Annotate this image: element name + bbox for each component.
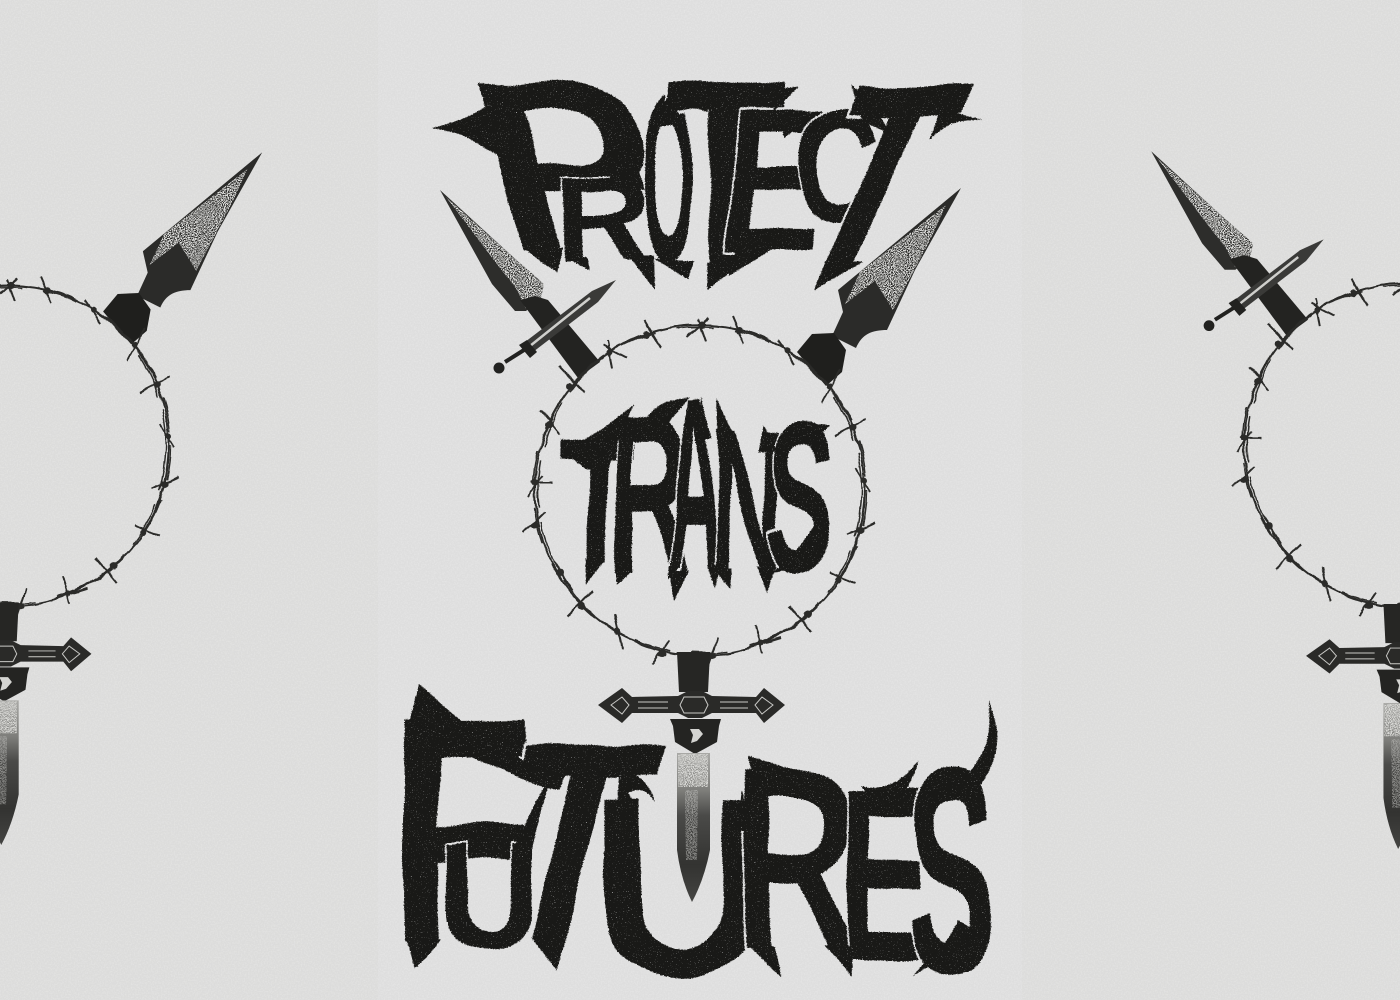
letter U: U: [439, 808, 540, 984]
letter F: F: [388, 650, 535, 1000]
lettering: PROTECT: [431, 25, 1003, 321]
letter S: S: [767, 377, 835, 619]
dagger handle: [677, 652, 710, 692]
letter T: T: [753, 31, 1003, 321]
lettering: TRANS: [560, 348, 835, 619]
letter C: C: [795, 76, 879, 255]
dagger blade: [677, 753, 710, 902]
emblem: barbed wire ring, spears, dagger: [440, 188, 961, 902]
panel: centre poster: [378, 0, 1022, 1000]
barbed wire ring: [524, 316, 874, 668]
letter R: R: [555, 152, 649, 288]
dagger cross guard: [598, 688, 785, 723]
lettering: FUTURES: [388, 650, 996, 1000]
letter O: O: [640, 44, 698, 314]
letter E: E: [713, 66, 835, 293]
spikes on PROTECT: [431, 83, 984, 291]
panel: right poster crop, repeat of emblem: [1151, 149, 1400, 849]
letter A: A: [667, 348, 722, 616]
spikes on FUTURES: [405, 683, 995, 978]
letter T: T: [560, 404, 636, 598]
icon: left spear: [440, 190, 600, 378]
letter R: R: [735, 713, 858, 1000]
letter T: T: [665, 25, 787, 321]
dagger crest shield: [670, 719, 721, 754]
letter N: N: [710, 387, 784, 614]
letter T: T: [460, 684, 685, 1000]
letter P: P: [449, 31, 692, 302]
panel: left poster crop, repeat of emblem: [0, 152, 262, 845]
icon: short sword: [494, 280, 616, 374]
letter R: R: [609, 367, 691, 618]
icon: dagger: [598, 652, 785, 902]
icon: right spear: [797, 188, 961, 386]
spikes on TRANS: [562, 397, 830, 600]
